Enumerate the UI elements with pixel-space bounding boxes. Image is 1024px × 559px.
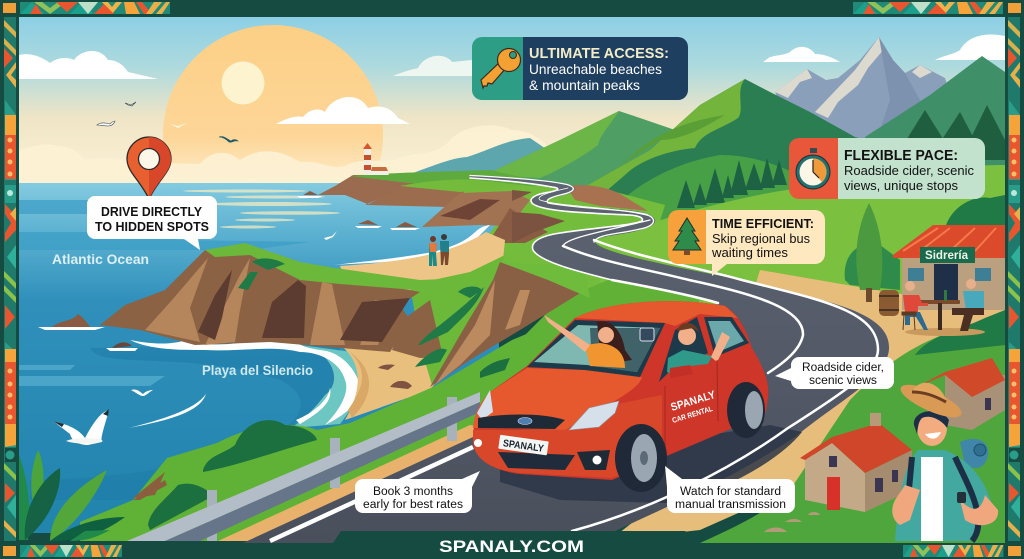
green land around the upper road — [450, 176, 665, 325]
label: Atlantic Ocean: Atlantic Ocean — [52, 251, 149, 267]
panel: flexible pace — [789, 138, 985, 199]
sand path right — [610, 270, 1005, 540]
callout: manual transmission — [665, 466, 795, 513]
footer tab — [0, 531, 1024, 559]
main cliff — [100, 250, 443, 358]
border pattern bottom right — [903, 545, 1004, 557]
couple on the beach — [429, 234, 449, 266]
headlights and grille — [474, 390, 619, 470]
palm plant — [19, 450, 125, 541]
callout: roadside cider: Roadside cider, — [802, 362, 884, 374]
callout: manual transmission: Watch for standard — [680, 486, 781, 498]
panel: ultimate access: & mountain peaks — [529, 77, 640, 93]
callout: book early — [355, 471, 480, 513]
stepping stones — [764, 512, 820, 532]
ocean light bands — [19, 190, 360, 500]
callout: manual transmission: manual transmission — [675, 499, 786, 511]
license plate: SPANALY — [502, 438, 545, 455]
panel: time efficient: waiting times — [711, 246, 788, 260]
location pin — [127, 137, 171, 199]
wave foam — [130, 338, 362, 425]
road shoulder — [218, 425, 500, 541]
red rental car — [473, 301, 768, 492]
icon: stopwatch — [796, 148, 830, 189]
distant headlands — [318, 174, 470, 205]
stone house front — [800, 413, 912, 512]
birds in sky — [97, 102, 238, 142]
distant blue hill — [413, 138, 570, 180]
sidreria building — [893, 225, 1005, 310]
second cliff — [430, 262, 582, 387]
footer url: SPANALY.COM — [439, 537, 584, 556]
green land and road surroundings — [440, 165, 1005, 460]
callout: drive directly: DRIVE DIRECTLY — [101, 204, 202, 219]
border pattern top right — [853, 2, 1003, 14]
gull large — [53, 409, 109, 445]
big green mountain — [570, 79, 905, 240]
panel: ultimate access: ULTIMATE ACCESS: — [529, 45, 669, 62]
panel: ultimate access: Unreachable beaches — [529, 61, 662, 77]
panel: ultimate access — [472, 37, 688, 100]
callout: book early: Book 3 months — [373, 486, 453, 498]
camera — [640, 328, 654, 341]
rear wheel — [727, 382, 765, 438]
panel: flexible pace: FLEXIBLE PACE: — [844, 148, 958, 164]
upper coast with lighthouse — [318, 143, 665, 325]
windshield and windows — [527, 317, 749, 382]
cliff grass top — [205, 243, 470, 292]
road lines — [270, 176, 878, 541]
icon: key — [481, 48, 520, 88]
panel: flexible pace: Roadside cider, scenic — [844, 163, 974, 178]
ocean — [19, 183, 499, 533]
car body — [473, 301, 768, 480]
sign: Sidrería: Sidrería — [925, 248, 968, 262]
lighthouse — [363, 143, 389, 175]
hiker — [892, 378, 998, 541]
car shadow on road — [500, 425, 802, 503]
woman passenger — [544, 315, 632, 368]
far right green mountain — [865, 56, 1005, 210]
guard rail — [127, 392, 480, 541]
border pattern top left — [20, 2, 170, 14]
panel: time efficient: Skip regional bus — [712, 232, 810, 246]
left hill — [485, 111, 675, 190]
door logo: SPANALY — [669, 389, 717, 414]
callout: roadside cider — [775, 357, 894, 389]
border pattern bottom left — [20, 545, 122, 557]
panel: flexible pace: views, unique stops — [844, 178, 959, 193]
icon: pine tree — [673, 218, 701, 255]
asphalt — [243, 175, 889, 543]
bushes — [945, 195, 1005, 240]
mountains — [413, 37, 1005, 240]
cove and cliffs — [100, 225, 590, 420]
label: Playa del Silencio: Playa del Silencio — [202, 363, 313, 378]
road — [218, 175, 889, 543]
wing mirror — [670, 365, 693, 378]
border pattern right — [1008, 17, 1020, 541]
rocks in water — [38, 191, 420, 351]
barrel — [879, 290, 899, 316]
lower right hill — [700, 320, 1005, 543]
stone house right — [915, 358, 1005, 430]
callout: roadside cider: scenic views — [809, 375, 877, 387]
man driver — [667, 323, 730, 374]
right side greenery and houses — [700, 195, 1005, 543]
sun — [163, 25, 383, 245]
snowy peaks — [775, 37, 960, 150]
foreground grass slope — [80, 320, 560, 541]
cypress tree — [856, 203, 882, 302]
panel: time efficient: TIME EFFICIENT: — [712, 217, 814, 231]
callout: book early: early for best rates — [363, 499, 463, 511]
front wheel — [615, 424, 667, 492]
rock near upper road — [566, 185, 648, 211]
green behind the cliffs — [410, 255, 505, 385]
callout: drive directly: TO HIDDEN SPOTS — [95, 219, 209, 234]
door logo — [669, 389, 717, 425]
scene: sky — [19, 17, 1005, 277]
pine trees — [677, 158, 787, 208]
panel: time efficient — [668, 210, 825, 276]
table with people — [902, 279, 985, 336]
callout: drive directly — [87, 196, 217, 250]
clouds — [19, 35, 1005, 183]
border pattern left — [4, 17, 16, 541]
beach — [333, 225, 490, 265]
door logo: CAR RENTAL — [671, 404, 714, 425]
